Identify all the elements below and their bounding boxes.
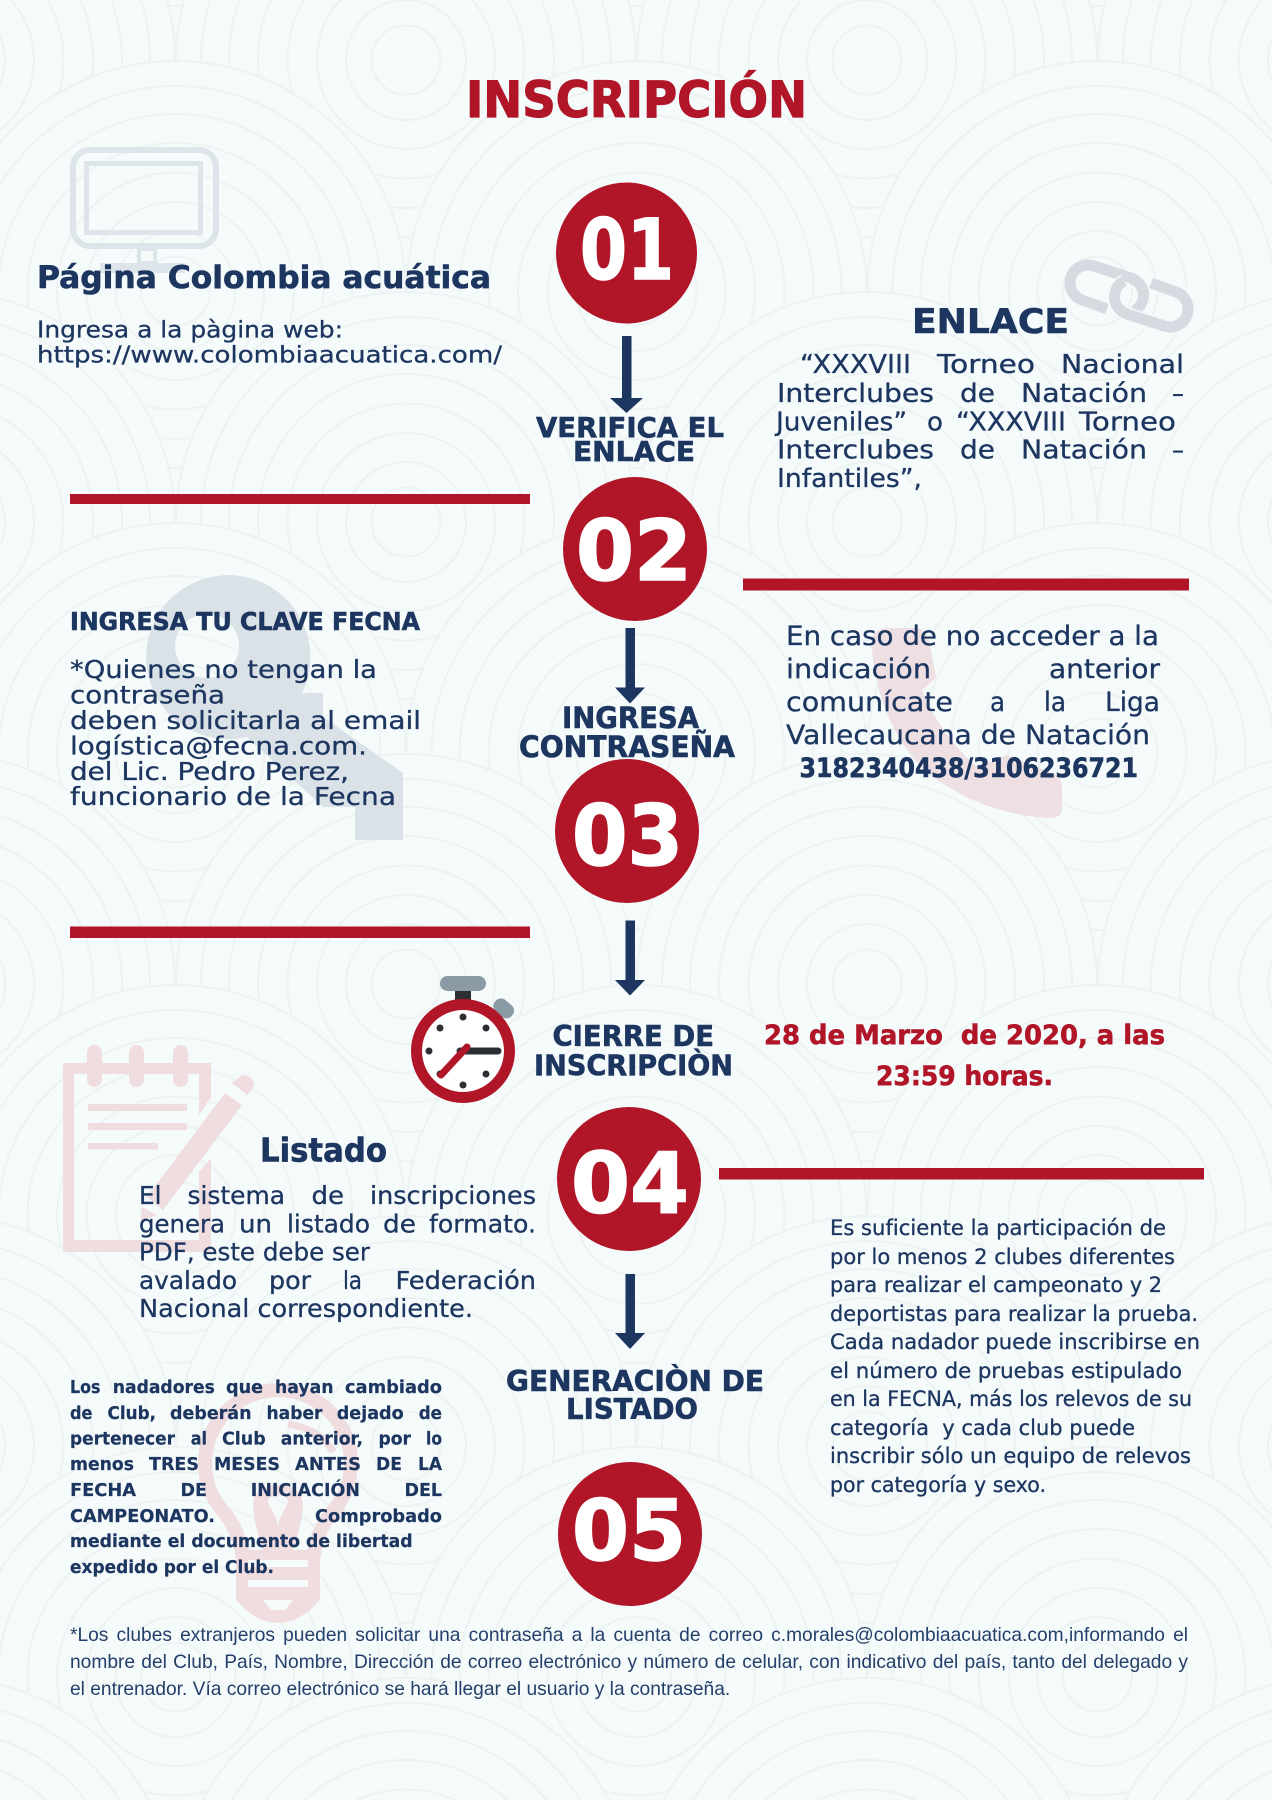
text: cambio de club rule: pertenecer xyxy=(70,1428,175,1450)
text: listado description: listado xyxy=(287,1210,370,1238)
icon: notepad and pencil xyxy=(63,1045,254,1252)
text: listado description: por xyxy=(269,1266,312,1295)
text: participation rules: inscribir sólo un equipo de relevos xyxy=(830,1444,1191,1468)
text: password instructions: *Quienes no tengan la xyxy=(70,655,377,684)
step label: verifica el enlace: ENLACE xyxy=(573,435,695,468)
text: closing date xyxy=(764,1020,1165,1092)
text: closing date: 23:59 horas. xyxy=(876,1061,1053,1092)
text: phone numbers: 3182340438/3106236721 xyxy=(800,753,1138,784)
text: cambio de club rule: Los xyxy=(70,1377,100,1398)
text: cambio de club rule: ANTES xyxy=(295,1454,361,1475)
icon: telephone xyxy=(871,628,1062,818)
text: cambio de club rule: Club, xyxy=(108,1403,156,1424)
text: cambio de club rule: INICIACIÓN xyxy=(251,1479,360,1501)
heading: ENLACE: ENLACE xyxy=(912,302,1069,342)
heading: INGRESA TU CLAVE FECNA: INGRESA TU CLAVE FECNA xyxy=(70,607,420,636)
step circle 05 xyxy=(558,1462,702,1606)
text: password instructions: funcionario de la Fecna xyxy=(70,782,396,811)
text: tournament names: Juveniles” xyxy=(774,408,907,438)
text: tournament names xyxy=(774,350,1184,494)
step circle 02: 02 xyxy=(576,502,692,600)
text: listado description: formato. xyxy=(429,1210,536,1238)
step circle 05: 05 xyxy=(572,1482,686,1580)
text: cambio de club rule: haber xyxy=(266,1403,323,1424)
text: cambio de club rule: Club xyxy=(222,1428,266,1450)
step circle 04: 04 xyxy=(571,1134,689,1232)
text: contact instructions xyxy=(786,621,1161,751)
text: tournament names: Infantiles”, xyxy=(777,464,922,494)
footnote: foreign clubs: *Los clubes extranjeros pueden solicitar una contraseña a la cuenta de correo c.morales@colombiaacuatica.com,informando el xyxy=(70,1625,1188,1646)
text: tournament names: “XXXVIII xyxy=(956,408,1066,438)
step circle 04 xyxy=(557,1107,701,1251)
step circle 02 xyxy=(563,477,707,621)
text: contact instructions: anterior xyxy=(1049,654,1161,685)
panel: ingresa tu clave xyxy=(70,607,421,811)
text: password instructions: del Lic. Pedro Perez, xyxy=(70,757,349,786)
step label: generación de listado xyxy=(506,1364,764,1426)
text: cambio de club rule: TRES xyxy=(149,1454,199,1475)
text: cambio de club rule: FECHA xyxy=(70,1480,136,1501)
red divider 1 xyxy=(70,494,530,504)
text: cambio de club rule: lo xyxy=(426,1428,442,1450)
icon: monitor xyxy=(73,150,216,273)
text: cambio de club rule: DE xyxy=(376,1454,402,1475)
arrow: step 02 to label xyxy=(615,628,645,704)
icon: stopwatch xyxy=(416,976,517,1098)
text: tournament names: Torneo xyxy=(936,350,1035,380)
arrow: step 03 to cierre xyxy=(615,920,645,996)
red divider 4 xyxy=(719,1168,1204,1180)
text: tournament names: Torneo xyxy=(1078,408,1176,438)
text: listado description xyxy=(139,1181,536,1323)
footnote: foreign clubs xyxy=(70,1625,1188,1700)
text: listado description: genera xyxy=(139,1210,225,1238)
text: tournament names: Nacional xyxy=(1061,350,1184,380)
step label: generación de listado: GENERACIÒN DE xyxy=(506,1364,764,1398)
text: contact instructions: Vallecaucana de Natación xyxy=(786,720,1150,751)
step label: cierre de inscripción: INSCRIPCIÒN xyxy=(534,1048,733,1082)
text: participation rules: para realizar el campeonato y 2 xyxy=(830,1273,1162,1297)
text: cambio de club rule: LA xyxy=(418,1454,442,1475)
text: participation rules: Cada nadador puede inscribirse en xyxy=(830,1330,1200,1354)
text: tournament names: o xyxy=(927,408,943,438)
icon: key xyxy=(146,575,403,840)
text: listado description: de xyxy=(312,1181,344,1210)
text: cambio de club rule: de xyxy=(419,1403,442,1424)
text: cambio de club rule: que xyxy=(226,1377,263,1398)
text: contact instructions: comunícate xyxy=(786,687,953,718)
text: password instructions: deben solicitarla al email xyxy=(70,706,421,735)
text: participation rules: deportistas para realizar la prueba. xyxy=(830,1302,1198,1326)
footnote: foreign clubs: el entrenador. Vía correo electrónico se hará llegar el usuario y la contraseña. xyxy=(70,1678,730,1700)
text: cambio de club rule: de xyxy=(70,1403,92,1424)
step circle 01 xyxy=(556,182,697,324)
heading: Listado: Listado xyxy=(260,1130,387,1170)
text: contact instructions: a xyxy=(990,687,1005,718)
text: tournament names: de xyxy=(960,379,995,409)
step circle 01: 01 xyxy=(580,201,674,299)
step label: ingresa contraseña xyxy=(519,701,736,764)
text: contact instructions: En caso de no acceder a la xyxy=(786,621,1159,652)
text: tournament names: Interclubes xyxy=(777,379,934,409)
text: cambio de club rule: dejado xyxy=(337,1403,404,1424)
text: password instructions: logística@fecna.com. xyxy=(70,732,367,760)
step label: verifica el enlace xyxy=(536,411,724,468)
text: tournament names: Natación xyxy=(1021,379,1147,409)
text: participation rules xyxy=(830,1216,1200,1497)
text: cambio de club rule: mediante el documento de libertad xyxy=(70,1531,413,1552)
text: participation rules: por lo menos 2 clubes diferentes xyxy=(830,1245,1175,1269)
text: closing date: 28 de Marzo de 2020, a las xyxy=(764,1020,1165,1051)
text: cambio de club rule xyxy=(70,1377,442,1578)
step label: ingresa contraseña: INGRESA xyxy=(562,701,700,735)
text: listado description: avalado xyxy=(139,1266,237,1295)
red divider 2 xyxy=(743,578,1189,590)
heading: Página Colombia acuática: Página Colombia acuática xyxy=(37,260,491,296)
text: tournament names: “XXXVIII xyxy=(800,350,911,380)
text: cambio de club rule: DE xyxy=(180,1480,207,1501)
text: participation rules: el número de pruebas estipulado xyxy=(830,1359,1182,1383)
text: participation rules: categoría y cada club puede xyxy=(830,1416,1135,1440)
text: listado description: Nacional correspondiente. xyxy=(139,1294,473,1323)
text: cambio de club rule: hayan xyxy=(275,1377,334,1398)
text: cambio de club rule: deberán xyxy=(170,1403,252,1424)
panel: enlace xyxy=(774,302,1184,494)
text: cambio de club rule: menos xyxy=(70,1454,134,1475)
arrow: step 04 to label xyxy=(615,1274,645,1349)
icon: chain link xyxy=(1070,265,1188,327)
text: cambio de club rule: al xyxy=(191,1428,207,1450)
step circle 03 xyxy=(555,759,699,903)
text: cambio de club rule: CAMPEONATO. xyxy=(70,1506,215,1527)
panel: listado xyxy=(139,1130,536,1323)
text: cambio de club rule: cambiado xyxy=(345,1377,442,1398)
text: participation rules: en la FECNA, más los relevos de su xyxy=(830,1387,1192,1411)
text: contact instructions: Liga xyxy=(1105,687,1160,718)
text: participation rules: Es suficiente la participación de xyxy=(830,1216,1166,1240)
text: listado description: inscripciones xyxy=(370,1181,536,1210)
text: web address: Ingresa a la pàgina web: xyxy=(37,316,343,344)
text: cambio de club rule: MESES xyxy=(214,1454,280,1475)
text: listado description: Federación xyxy=(396,1266,536,1295)
panel: en caso de no acceder xyxy=(786,621,1161,784)
panel: Página Colombia acuática xyxy=(37,260,502,368)
footnote: foreign clubs: nombre del Club, País, Nombre, Dirección de correo electrónico y número de celular, con indicativo del país, tanto del delegado y xyxy=(70,1652,1188,1673)
text: listado description: sistema xyxy=(188,1181,285,1210)
text: tournament names: Natación xyxy=(1021,436,1147,466)
text: tournament names: Interclubes xyxy=(777,436,934,466)
text: listado description: El xyxy=(139,1181,162,1210)
text: tournament names: – xyxy=(1172,379,1184,409)
red divider 3 xyxy=(70,926,530,938)
step circle 03: 03 xyxy=(572,787,683,885)
text: listado description: la xyxy=(343,1266,362,1295)
text: listado description: un xyxy=(239,1210,272,1238)
text: tournament names: de xyxy=(960,436,995,466)
text: contact instructions: la xyxy=(1044,687,1066,718)
icon: light bulb xyxy=(205,1390,351,1623)
step label: cierre de inscripción: CIERRE DE xyxy=(552,1020,714,1053)
step label: generación de listado: LISTADO xyxy=(566,1393,698,1426)
arrow: step 01 to label xyxy=(610,336,643,413)
text: password instructions: contraseña xyxy=(70,680,225,710)
text: web address: https://www.colombiaacuatica.com/ xyxy=(37,340,502,368)
text: cambio de club rule: Comprobado xyxy=(315,1506,442,1527)
text: cambio de club rule: expedido por el Club. xyxy=(70,1557,274,1578)
text: contact instructions: indicación xyxy=(786,654,931,685)
text: web address xyxy=(37,316,502,368)
text: cambio de club rule: anterior, xyxy=(281,1428,363,1450)
text: tournament names: – xyxy=(1172,436,1184,466)
step label: cierre de inscripción xyxy=(534,1020,733,1082)
text: password instructions xyxy=(70,655,421,811)
text: listado description: de xyxy=(383,1210,416,1238)
step label: ingresa contraseña: CONTRASEÑA xyxy=(519,730,736,764)
text: participation rules: por categoría y sexo. xyxy=(830,1473,1046,1497)
title: INSCRIPCIÓN xyxy=(466,70,807,129)
text: cambio de club rule: por xyxy=(378,1428,411,1450)
text: cambio de club rule: nadadores xyxy=(113,1377,215,1398)
step label: verifica el enlace: VERIFICA EL xyxy=(536,411,724,444)
text: listado description: PDF, este debe ser xyxy=(139,1238,371,1266)
text: cambio de club rule: DEL xyxy=(404,1480,442,1501)
